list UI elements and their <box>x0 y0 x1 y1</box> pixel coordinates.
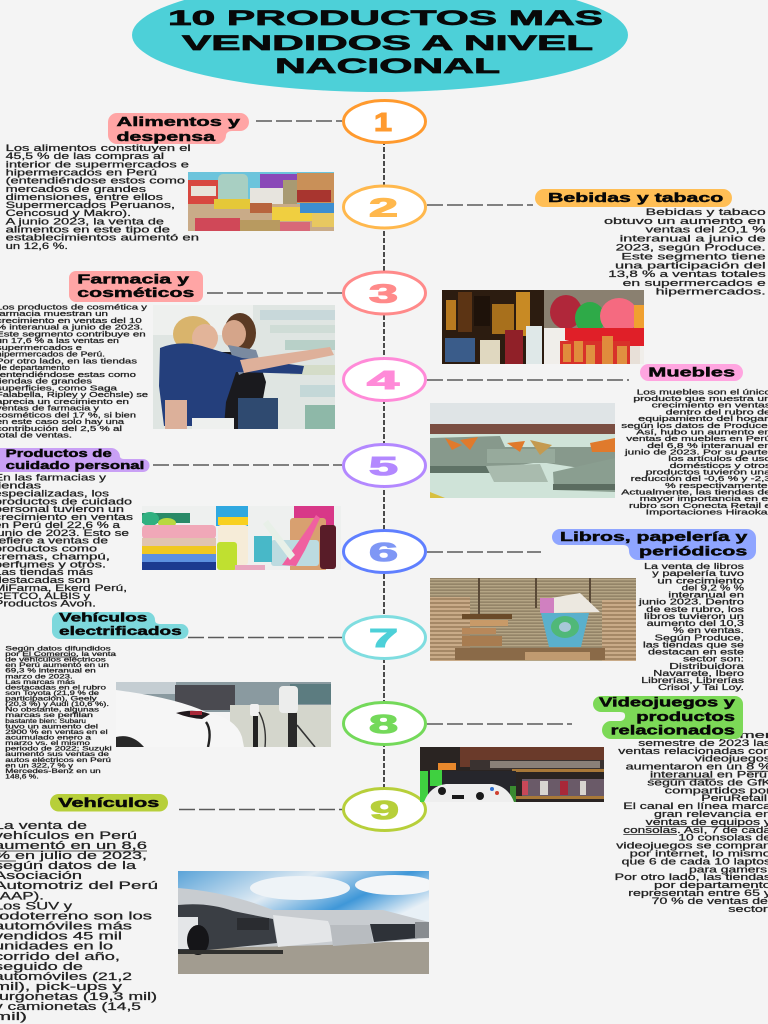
heading: libros <box>552 529 756 560</box>
text: alimentos: establecimientos aumentó en <box>6 233 199 243</box>
heading: libros: Libros, papelería y <box>560 529 749 544</box>
text: alimentos: hipermercados en Perú <box>6 168 157 178</box>
title banner: VENDIDOS A NIVEL <box>182 32 593 55</box>
text: libros: La venta de libros <box>644 562 744 571</box>
photo: drinks and cigarettes <box>442 290 644 364</box>
text: videojuegos: Por otro lado, las tiendas <box>615 872 768 882</box>
text: bebidas: interanual a junio de <box>620 233 766 244</box>
section 8: videojuegos y productos relacionados <box>427 695 768 914</box>
text: videojuegos: PeruRetail. <box>701 793 768 803</box>
text: libros: las tiendas que se <box>643 640 744 649</box>
section 6: libros, papelería y periódicos <box>427 529 756 692</box>
connector 4 <box>427 379 629 381</box>
text: libros: del 9,2 % % <box>682 584 744 592</box>
text: muebles: rubro son Conecta Retail e <box>629 501 768 510</box>
heading: vehículos: Vehículos <box>58 795 159 810</box>
text: alimentos <box>6 143 199 251</box>
text: alimentos: 45,5 % de las compras al <box>6 151 164 161</box>
heading: videojuegos <box>593 695 743 739</box>
photo: electric car charging <box>116 682 331 747</box>
text: videojuegos: por departamento <box>654 880 768 890</box>
text: vehículos electrificados: 69,3 % interanual en <box>5 668 96 675</box>
connector 7 <box>188 636 342 638</box>
badge 1 <box>344 100 426 142</box>
text: bebidas: Bebidas y tabaco <box>646 206 766 217</box>
text: videojuegos: 70 % de ventas del <box>652 896 768 906</box>
title banner: NACIONAL <box>275 55 500 78</box>
heading: videojuegos: productos <box>636 709 735 724</box>
text: videojuegos: videojuegos <box>695 754 768 764</box>
text: bebidas: Este segmento tiene <box>621 250 766 261</box>
text: muebles: domésticos y otros <box>670 461 768 470</box>
badge 9 <box>344 788 426 830</box>
text: videojuegos: El canal en línea marca <box>623 801 768 811</box>
photo: row of cars <box>178 871 435 974</box>
section 1: alimentos y despensa <box>6 113 342 251</box>
text: videojuegos: por internet, lo mismo <box>630 848 768 858</box>
badge 4 <box>344 358 426 400</box>
text: libros: y papelería tuvo <box>652 569 745 578</box>
title banner: 10 PRODUCTOS MAS <box>168 7 603 30</box>
connector 5 <box>153 464 342 466</box>
text: libros: % en ventas. <box>673 626 744 635</box>
heading: libros: periódicos <box>639 544 747 559</box>
text: muebles: Importaciones Hiraoka. <box>646 508 768 516</box>
photo: personal care products <box>141 506 341 574</box>
text: libros: sector son: <box>683 655 744 664</box>
text: alimentos: Supermercados Peruanos, <box>6 200 175 210</box>
text: videojuegos: aumentaron en un 8 % <box>626 762 768 772</box>
heading: vehículos electrificados: electrificados <box>59 624 182 638</box>
text: bebidas: una participación del <box>615 259 766 270</box>
badge 8: 8 <box>369 709 398 739</box>
title banner <box>132 0 628 92</box>
heading: vehículos electrificados <box>52 611 189 639</box>
text: vehículos electrificados: marzo vs. el mismo <box>5 740 91 747</box>
text: bebidas: 13,8 % a ventas totales <box>608 268 766 279</box>
text: videojuegos: sector. <box>728 904 768 914</box>
heading: vehículos <box>50 794 168 812</box>
text: libros: libros tuvieron un <box>644 612 744 621</box>
section 4: muebles <box>427 364 768 516</box>
text: videojuegos: interanual en Perú, <box>650 770 768 780</box>
badge 6 <box>344 530 426 572</box>
badge 2 <box>344 186 426 228</box>
text: vehículos electrificados: por El Comercio, la venta <box>5 651 117 658</box>
text: farmacia <box>0 302 148 440</box>
text: alimentos: interior de supermercados e <box>6 159 189 169</box>
text: muebles: % respectivamente. <box>665 481 768 490</box>
text: alimentos: mercados de grandes <box>6 184 147 194</box>
text: videojuegos: según datos de GfK <box>647 777 768 787</box>
text: cuidado personal <box>0 473 134 609</box>
text: alimentos: un 12,6 %. <box>6 241 68 251</box>
text: videojuegos: semestre de 2023 las <box>638 738 768 748</box>
photo: game controller and shelves <box>420 747 604 802</box>
connector 6 <box>427 551 541 553</box>
text: videojuegos <box>615 730 768 914</box>
text: vehículos electrificados: destacadas en el rubro <box>5 684 107 691</box>
heading: muebles <box>640 364 743 381</box>
text: muebles: productos tuvieron una <box>646 467 768 476</box>
text: videojuegos: que 6 de cada 10 laptos <box>622 856 768 866</box>
text: videojuegos: ventas relacionadas con <box>618 746 768 756</box>
text: libros: un crecimiento <box>657 576 745 585</box>
text: vehículos electrificados: en Perú aumentó en un <box>5 662 109 669</box>
text: bebidas: 2023, según Produce. <box>616 241 766 252</box>
section 2: bebidas y tabaco <box>427 189 766 364</box>
text: libros: Según Produce, <box>655 633 744 642</box>
text: libros: de este rubro, los <box>646 605 744 614</box>
text: alimentos: A junio 2023, la venta de <box>6 216 164 226</box>
badge 8 <box>344 702 426 744</box>
text: muebles <box>621 387 768 516</box>
heading: farmacia y cosméticos: Farmacia y <box>77 271 190 286</box>
text: vehículos electrificados: 2900 % en ventas en el <box>5 729 108 736</box>
heading: farmacia y cosméticos: cosméticos <box>77 285 194 300</box>
badge 2: 2 <box>369 192 398 222</box>
text: muebles: mayor importancia en el <box>640 494 768 503</box>
badge 5: 5 <box>369 451 398 481</box>
badge 7: 7 <box>369 623 398 653</box>
text: vehículos <box>0 820 158 1023</box>
text: libros <box>637 562 745 692</box>
heading: alimentos y despensa: Alimentos y <box>116 114 241 129</box>
heading: farmacia y cosméticos <box>69 271 203 302</box>
heading: cuidado personal <box>0 448 150 472</box>
text: libros: Librerías, Librerías <box>641 676 744 685</box>
text: vehículos electrificados: 148,6 %. <box>5 774 39 780</box>
text: vehículos electrificados: de vehículos eléctricos <box>5 656 106 664</box>
text: muebles: del 6,8 % interanual en <box>647 441 768 450</box>
section 9: vehículos <box>0 794 435 1023</box>
connector 9 <box>179 808 342 810</box>
text: alimentos: dimensiones, entre ellos <box>6 192 164 202</box>
text: videojuegos: representan entre 65 y <box>628 888 768 898</box>
badge 5 <box>344 444 426 486</box>
text: videojuegos: En el primer <box>672 730 768 740</box>
text: videojuegos: videojuegos se compran <box>616 841 768 851</box>
badge 7 <box>344 616 426 658</box>
badge 3 <box>344 272 426 314</box>
badge 4: 4 <box>367 365 400 395</box>
text: vehículos electrificados: marzo de 2023. <box>5 673 73 680</box>
text: bebidas: ventas del 20,1 % <box>646 224 766 235</box>
text: vehículos electrificados: (20,3 %) y Audi (10,6 %). <box>5 701 109 708</box>
badge 6: 6 <box>369 537 398 567</box>
text: muebles: producto que muestra un <box>633 394 768 403</box>
section 5: productos de cuidado personal <box>0 448 342 609</box>
text: vehículos electrificados: aumentó sus ventas de <box>5 751 110 758</box>
text: vehículos electrificados: son Toyota (21,9 % de <box>5 690 100 697</box>
connector 8 <box>427 723 572 725</box>
central timeline spine <box>383 140 385 830</box>
photo: pharmacy staff <box>153 305 335 429</box>
heading: videojuegos: relacionados <box>611 723 735 738</box>
text: muebles: Actualmente, las tiendas de <box>621 488 768 496</box>
text: videojuegos: para gamers. <box>689 864 768 874</box>
connector 3 <box>207 292 342 294</box>
photo: stacks of books and recycling bin <box>430 578 636 661</box>
text: libros: junio 2023. Dentro <box>637 598 745 607</box>
photo: groceries <box>188 172 334 231</box>
text: videojuegos: 10 consolas de <box>678 833 768 843</box>
text: vehículos electrificados <box>5 645 117 780</box>
section 3: farmacia y cosméticos <box>0 271 342 440</box>
heading: bebidas y tabaco <box>535 189 732 207</box>
text: bebidas: obtuvo un aumento en <box>604 215 766 226</box>
heading: videojuegos: Videojuegos y <box>599 695 736 710</box>
text: bebidas: hipermercados. <box>656 286 766 297</box>
text: libros: Crisol y Tai Loy. <box>658 683 744 692</box>
text: vehículos electrificados: participación), Geely <box>5 696 98 702</box>
text: vehículos electrificados: en un 322,7 % y <box>5 762 74 769</box>
text: muebles: junio de 2023. Por su parte, <box>623 447 768 456</box>
text: vehículos electrificados: marcas se perfilan <box>5 712 93 719</box>
text: alimentos: Los alimentos constituyen el <box>6 143 191 153</box>
text: vehículos electrificados: autos eléctricos en Perú <box>5 757 111 764</box>
text: muebles: Así, hubo un aumento en <box>636 427 768 436</box>
text: videojuegos: compartidos por <box>665 785 768 795</box>
text: bebidas <box>604 206 766 297</box>
text: muebles: crecimiento en ventas <box>652 401 768 410</box>
text: videojuegos: consolas. Así, 7 de cada <box>623 825 768 835</box>
step badges 1 to 9 <box>344 100 426 830</box>
text: muebles: según los datos de Produce. <box>621 421 768 430</box>
connector 1 <box>256 120 342 122</box>
text: alimentos: alimentos en este tipo de <box>6 224 170 234</box>
connector 2 <box>427 204 533 206</box>
badge 1: 1 <box>374 107 392 137</box>
text: vehículos electrificados: No obstante, algunas <box>5 707 99 714</box>
heading: alimentos y despensa <box>108 113 249 144</box>
heading: bebidas y tabaco: Bebidas y tabaco <box>548 190 723 205</box>
text: bebidas: en supermercados e <box>623 277 766 288</box>
text: vehículos electrificados: Según datos difundidos <box>5 645 111 652</box>
section 7: vehículos electrificados <box>5 611 342 780</box>
text: vehículos electrificados: tuvo un aumento del <box>5 723 98 730</box>
text: muebles: equipamiento del hogar, <box>638 414 768 423</box>
badge 9: 9 <box>370 795 399 825</box>
text: alimentos: Cencosud y Makro). <box>6 208 131 218</box>
heading: cuidado personal: Productos de <box>6 448 112 460</box>
text: vehículos electrificados: Las marcas más <box>5 679 75 686</box>
text: libros: Distribuidora <box>669 662 745 671</box>
text: muebles: ventas de muebles en Perú <box>626 434 768 443</box>
text: vehículos electrificados: periodo de 2022; Suzuki <box>5 746 112 753</box>
text: muebles: reducción del -0,6 % y -2,3 <box>631 474 768 483</box>
text: vehículos electrificados: bastante bien: Subaru <box>5 718 86 725</box>
text: videojuegos: ventas de equipos y <box>646 817 768 827</box>
text: vehículos electrificados: Mercedes-Benz en un <box>5 768 101 775</box>
text: libros: aumento del 10,3 <box>647 619 744 628</box>
heading: cuidado personal: cuidado personal <box>6 460 144 472</box>
text: muebles: Los muebles son el único <box>637 387 768 396</box>
heading: alimentos y despensa: despensa <box>116 129 216 144</box>
text: libros: destacan en este <box>648 648 744 656</box>
text: muebles: los artículos de uso <box>668 454 768 463</box>
text: vehículos electrificados: acumulado enero a <box>5 734 92 742</box>
photo: furniture showroom <box>430 403 615 498</box>
text: videojuegos: gran relevancia en <box>654 809 768 819</box>
heading: vehículos electrificados: Vehículos <box>59 611 148 625</box>
badge 3: 3 <box>369 278 398 308</box>
text: muebles: dentro del rubro de <box>666 407 768 416</box>
text: libros: Navarrete, Ibero <box>653 669 745 678</box>
text: alimentos: (entendiéndose estos como <box>6 176 185 186</box>
heading: muebles: Muebles <box>648 364 735 380</box>
text: libros: interanual en <box>668 591 744 600</box>
